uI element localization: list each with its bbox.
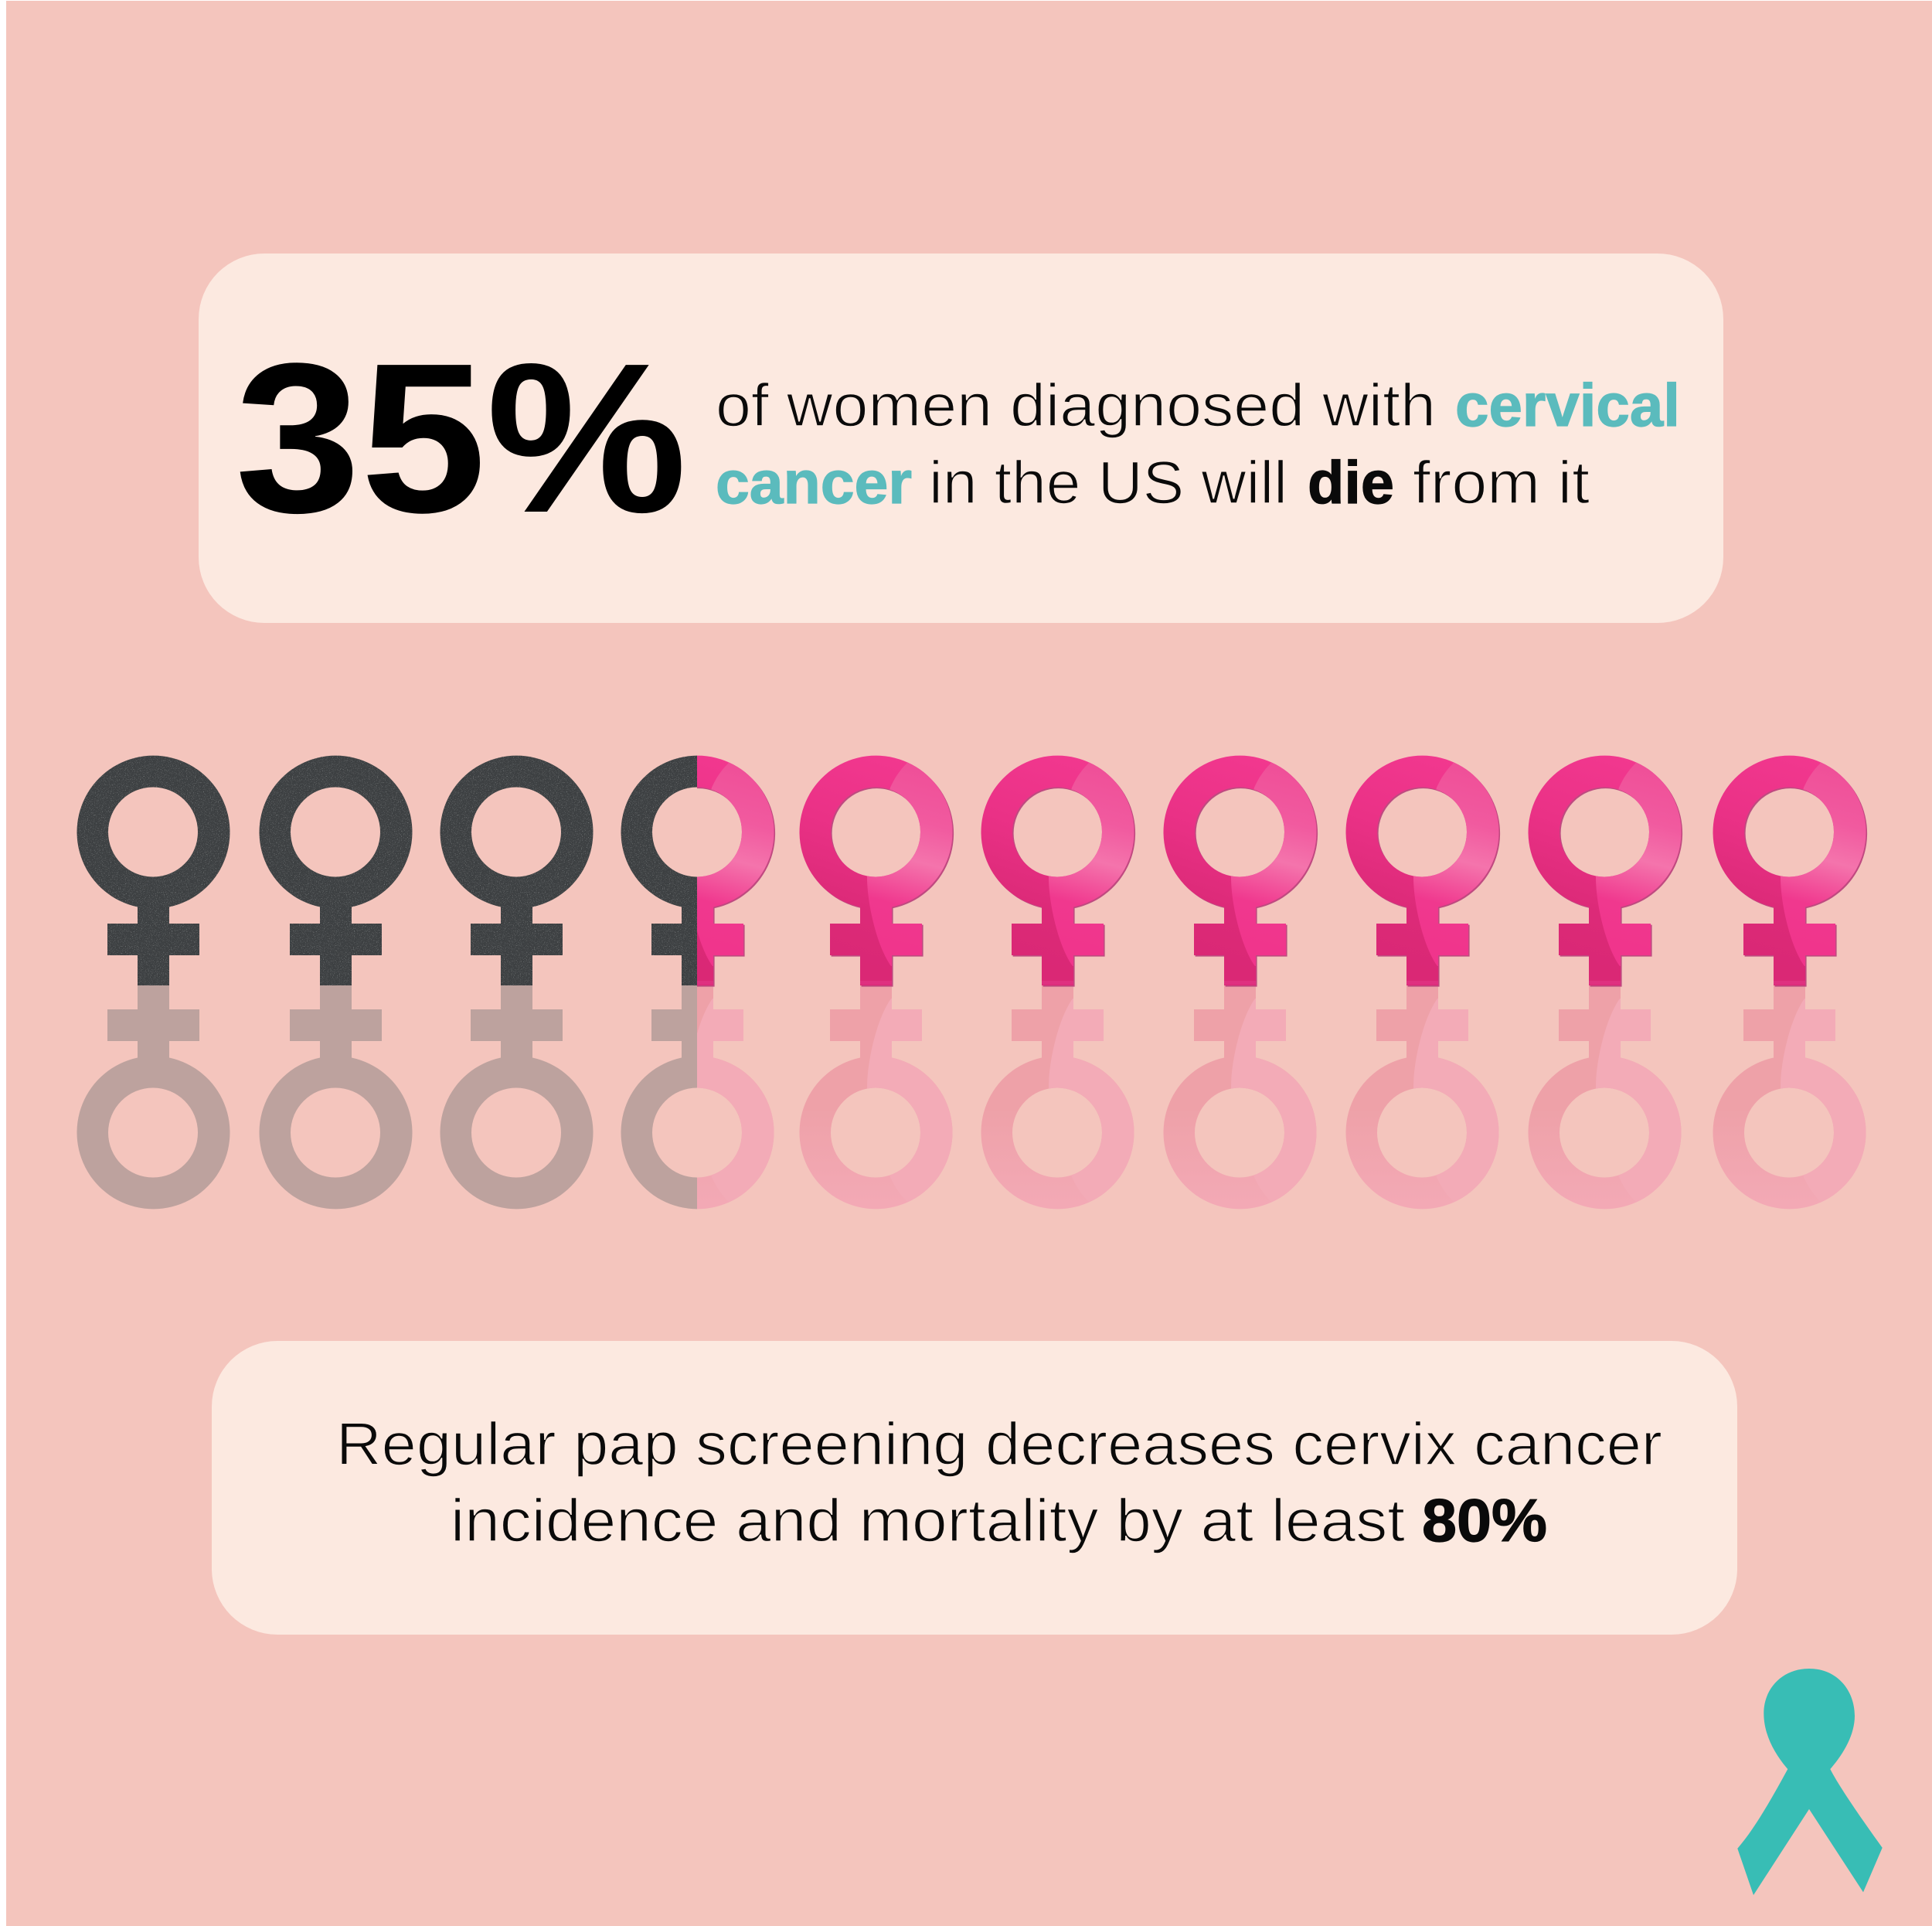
symbol 8: pink bbox=[1346, 742, 1507, 987]
symbol 2: dark bbox=[260, 756, 413, 985]
symbol 6: pink bbox=[981, 742, 1142, 987]
headline text: cancer bbox=[716, 448, 912, 516]
screening text: 80% bbox=[1422, 1486, 1547, 1554]
symbol 9: pink bbox=[1529, 742, 1689, 987]
panel background bbox=[199, 254, 1723, 623]
pictogram: ten female symbols with reflections, 3.5 dark bbox=[77, 742, 1874, 1223]
headline text bbox=[716, 371, 1680, 516]
symbol 3: dark bbox=[440, 756, 594, 985]
symbol 4: half dark half pink bbox=[621, 742, 782, 987]
headline text: die bbox=[1308, 448, 1394, 516]
panel: headline statistic bbox=[199, 254, 1723, 623]
big number 35%: 35% bbox=[235, 319, 687, 557]
symbol 10: pink bbox=[1713, 742, 1874, 987]
headline text: from it bbox=[1413, 448, 1590, 516]
screening text bbox=[336, 1410, 1662, 1554]
panel background bbox=[212, 1341, 1737, 1635]
icon: teal awareness ribbon bbox=[1737, 1669, 1883, 1895]
headline text: of women diagnosed with bbox=[716, 371, 1436, 439]
screening text: incidence and mortality by at least bbox=[451, 1486, 1405, 1554]
panel: screening fact bbox=[212, 1341, 1737, 1635]
headline text: in the US will bbox=[929, 448, 1287, 516]
reflection row bbox=[77, 979, 1874, 1223]
headline text: cervical bbox=[1455, 371, 1680, 439]
symbol 1: dark bbox=[77, 756, 230, 985]
symbol 5: pink bbox=[799, 742, 961, 987]
screening text: Regular pap screening decreases cervix cancer bbox=[336, 1410, 1662, 1478]
symbol 7: pink bbox=[1164, 742, 1325, 987]
